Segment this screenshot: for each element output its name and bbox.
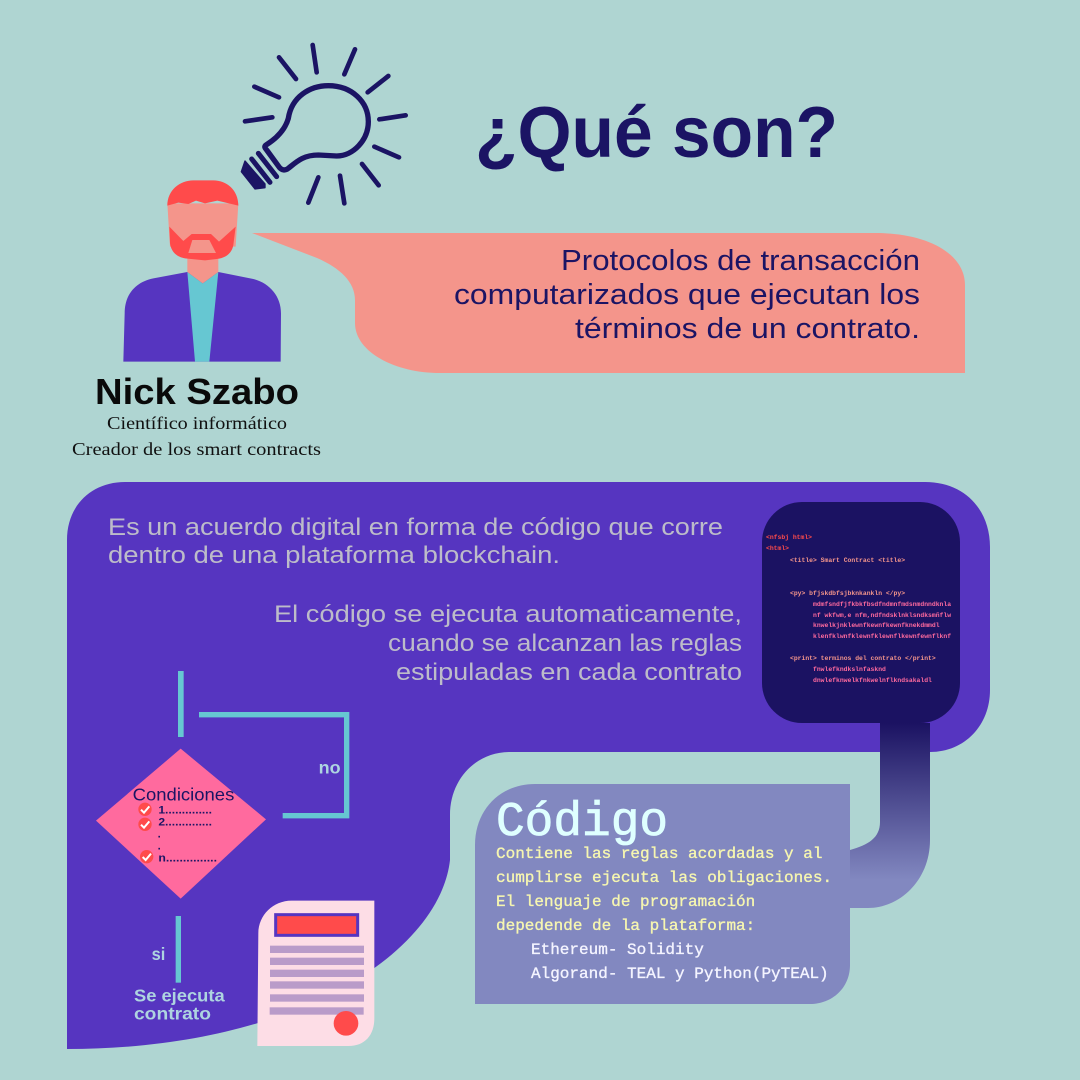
code text: <nfsbj html> [766, 534, 812, 541]
name and role: Científico informático [107, 413, 287, 433]
connector pipe [840, 715, 930, 908]
icon: Nick Szabo portrait [123, 180, 281, 362]
icon: contract document [257, 901, 374, 1046]
decision diamond: . [158, 840, 161, 852]
Código body text [496, 845, 832, 983]
Código body text: Algorand- TEAL y Python(PyTEAL) [531, 965, 829, 983]
code text: mdmfsndfjfkbkfbsdfndmnfmdsnmdnndknla [813, 601, 951, 608]
code text: nf wkfwm,e nfm,ndfndsklnklsndksmñflw [813, 612, 951, 619]
speech bubble [252, 233, 965, 373]
panel: purple main [67, 482, 990, 1049]
connector pipe upper segment [880, 723, 930, 752]
description text: El código se ejecuta automaticamente, [274, 601, 742, 628]
code text: <title> Smart Contract <title> [790, 557, 905, 564]
result label [134, 986, 225, 1023]
panel: code editor [762, 502, 960, 723]
bubble text: computarizados que ejecutan los [454, 279, 920, 311]
name and role [72, 371, 321, 459]
code text: <print> terminos del contrato </print> [790, 655, 936, 662]
flowchart [96, 671, 374, 1046]
code text [766, 534, 951, 684]
bubble text [454, 245, 920, 345]
name and role: Nick Szabo [95, 371, 299, 412]
decision diamond: 2.............. [158, 816, 212, 828]
bubble text: términos de un contrato. [575, 313, 920, 345]
Código heading: Código [496, 796, 668, 850]
code text: fnwlefkndkslnfasknd [813, 666, 886, 673]
bubble text: Protocolos de transacción [561, 245, 920, 277]
panel: Código [475, 784, 850, 1004]
description text: dentro de una plataforma blockchain. [108, 542, 560, 569]
result label: contrato [134, 1003, 211, 1023]
code text: knwelkjnklewnfkewnfkewnfknekdmmdl [813, 622, 940, 629]
Código body text: El lenguaje de programación [496, 893, 755, 911]
decision diamond: 1.............. [158, 804, 212, 816]
description text: Es un acuerdo digital en forma de código que corre [108, 514, 723, 541]
Código body text: Contiene las reglas acordadas y al [496, 845, 822, 863]
title: ¿Qué son? [475, 93, 838, 173]
name and role: Creador de los smart contracts [72, 439, 321, 459]
icon: light bulb [241, 45, 406, 203]
code text: klenfklwnfklewnfklewnflkewnfewnflknf [813, 633, 951, 640]
code text: <html> [766, 545, 789, 552]
description text: cuando se alcanzan las reglas [388, 630, 742, 657]
decision diamond: n............... [158, 852, 217, 864]
Código body text: Ethereum- Solidity [531, 941, 704, 959]
code text: dnwlefknwelkfnkwelnflkndsakaldl [813, 677, 932, 684]
arrow: yes line [176, 916, 181, 983]
no label: no [319, 757, 341, 777]
Código body text: depedende de la plataforma: [496, 917, 755, 935]
decision diamond: Condiciones [133, 785, 234, 805]
description text: estipuladas en cada contrato [396, 659, 742, 686]
description text [108, 514, 742, 686]
decision diamond: . [158, 829, 161, 841]
arrow: input line [178, 671, 184, 737]
decision diamond [96, 749, 266, 899]
si label: si [152, 944, 165, 964]
Código body text: cumplirse ejecuta las obligaciones. [496, 869, 832, 887]
arrow: no loop [199, 715, 347, 816]
result label: Se ejecuta [134, 986, 225, 1006]
code text: <py> bfjskdbfsjbknkankln </py> [790, 590, 905, 597]
